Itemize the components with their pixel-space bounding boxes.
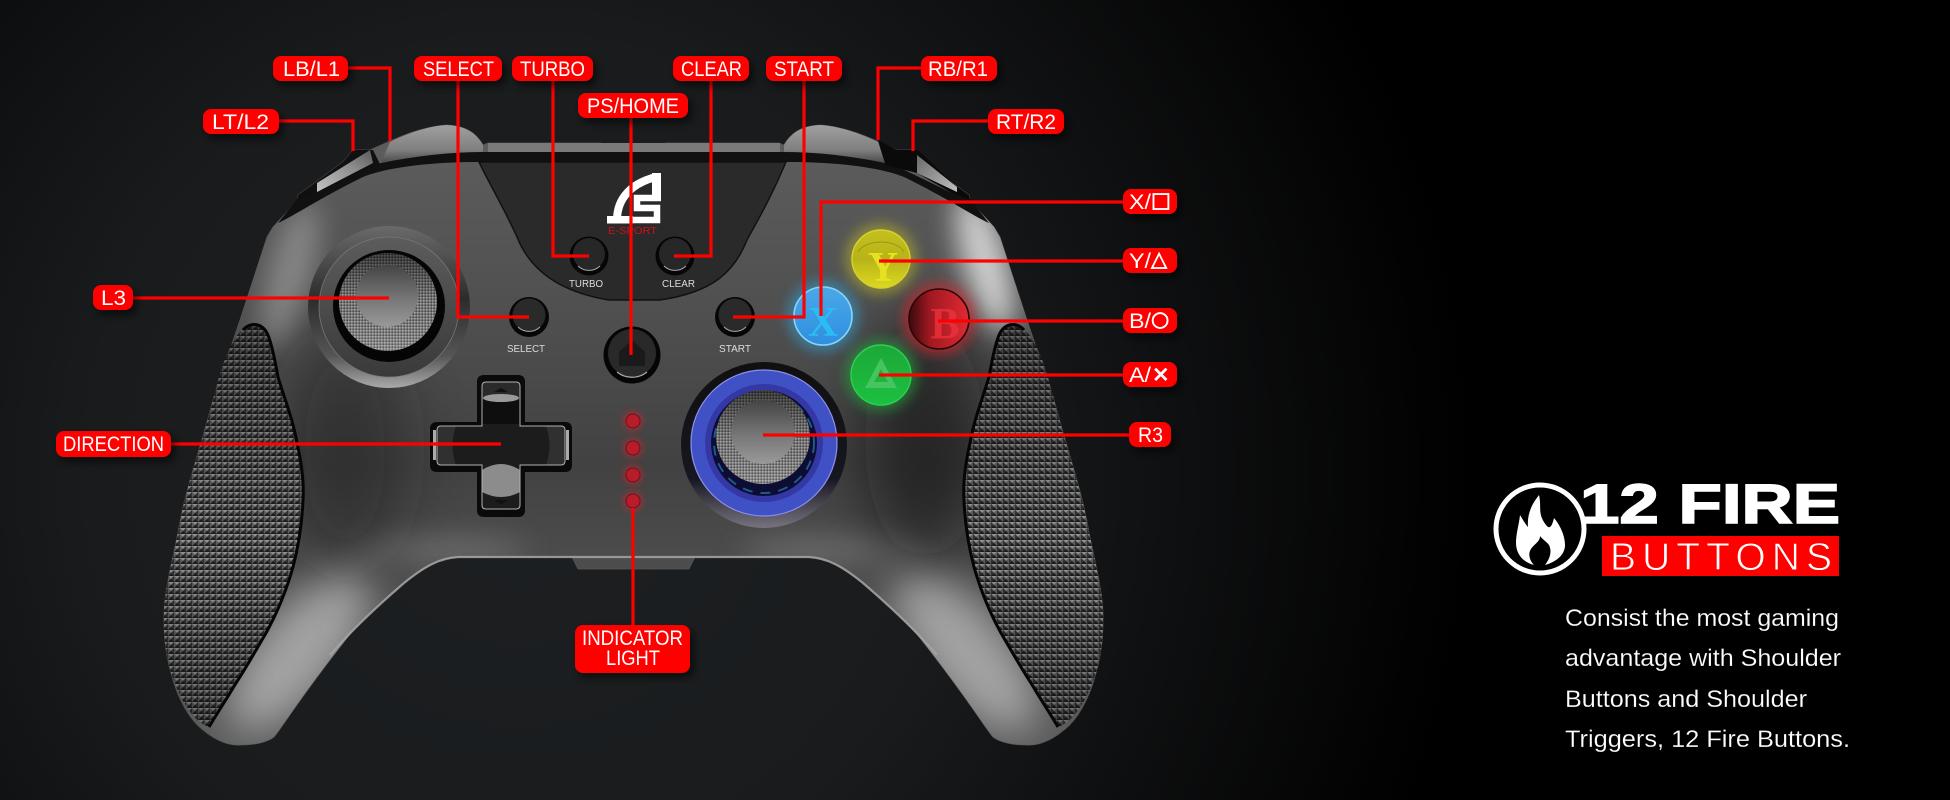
label: Y/triangle: Y/ — [1129, 250, 1151, 273]
label: LT/L2 — [203, 109, 279, 134]
label: TURBO: TURBO — [520, 58, 585, 81]
indicator lights — [622, 410, 644, 512]
label: X/square: X/ — [1129, 191, 1151, 214]
turbo button — [570, 236, 608, 276]
B button: B — [930, 299, 960, 348]
X button — [787, 280, 859, 352]
small button captions — [507, 278, 752, 355]
brand logo — [607, 173, 661, 237]
left trigger housing — [298, 150, 380, 200]
description text: advantage with Shoulder — [1565, 645, 1841, 672]
label: B/circle: B/ — [1129, 310, 1151, 333]
label: X/square — [1123, 188, 1177, 214]
label: Y/triangle: △ — [1151, 247, 1168, 271]
label: RT/R2: RT/R2 — [996, 111, 1056, 134]
A button — [845, 339, 917, 411]
clear button — [656, 236, 694, 276]
label: INDICATOR LIGHT: LIGHT — [606, 647, 660, 670]
icon: flame in circle — [1496, 485, 1584, 573]
left stick — [308, 226, 470, 388]
label: LT/L2: LT/L2 — [212, 111, 269, 134]
center face panel — [479, 162, 786, 300]
logo caption: E-SPORT — [608, 225, 658, 237]
label: CLEAR: CLEAR — [681, 58, 742, 81]
label: R3: R3 — [1138, 424, 1163, 447]
Y button: Y — [868, 245, 898, 291]
small button captions: START — [719, 343, 752, 355]
heading: BUTTONS: BUTTONS — [1610, 536, 1832, 579]
heading: 12 FIRE: 12 FIRE — [1580, 472, 1840, 535]
description text — [1565, 605, 1850, 753]
home button — [604, 326, 660, 384]
description text: Triggers, 12 Fire Buttons. — [1565, 726, 1850, 753]
label: B/circle — [1123, 307, 1177, 333]
controller body — [164, 125, 1103, 745]
label: INDICATOR LIGHT — [575, 625, 690, 673]
body shading — [204, 184, 1061, 754]
start button — [715, 297, 755, 337]
left trigger LT — [317, 150, 373, 192]
leader lines — [133, 68, 1129, 625]
right bumper RB — [784, 125, 885, 163]
description text: Buttons and Shoulder — [1565, 686, 1807, 713]
Y button — [845, 223, 917, 295]
label: L3: L3 — [101, 287, 126, 310]
label: DIRECTION: DIRECTION — [63, 433, 164, 456]
shoulder band — [278, 152, 989, 223]
label: LB/L1 — [273, 56, 348, 81]
right trigger housing — [878, 140, 969, 200]
label: INDICATOR LIGHT: INDICATOR — [582, 627, 683, 650]
left bumper LB — [381, 125, 483, 163]
label: A/cross: A/ — [1129, 364, 1151, 387]
label: START: START — [774, 58, 834, 81]
feature block: 12 fire buttons — [1496, 472, 1850, 753]
bottom edge highlight — [330, 557, 937, 655]
small button captions: CLEAR — [662, 278, 695, 290]
left grip — [164, 324, 303, 727]
d-pad — [430, 375, 572, 517]
select button — [509, 297, 549, 337]
label: RB/R1: RB/R1 — [928, 58, 988, 81]
small button captions: TURBO — [569, 278, 603, 290]
label: A/cross: ✕ — [1152, 363, 1170, 387]
label: R3 — [1129, 422, 1171, 447]
label: LB/L1: LB/L1 — [283, 58, 340, 81]
label: SELECT: SELECT — [423, 58, 494, 81]
label: A/cross — [1123, 362, 1177, 387]
B button — [903, 283, 975, 355]
game controller — [164, 125, 1103, 754]
label: PS/HOME: PS/HOME — [587, 95, 679, 118]
label: Y/triangle — [1123, 247, 1177, 273]
right trigger RT — [917, 155, 957, 192]
label: B/circle: ○ — [1151, 307, 1169, 331]
charging port nub — [600, 138, 666, 143]
description text: Consist the most gaming — [1565, 605, 1839, 632]
label: L3 — [93, 285, 133, 310]
right grip — [964, 324, 1103, 727]
label: X/square: □ — [1151, 188, 1171, 212]
small button captions: SELECT — [507, 343, 546, 355]
X button: X — [808, 300, 838, 346]
rear strip — [488, 143, 780, 152]
small buttons — [509, 236, 755, 384]
right stick — [681, 362, 847, 528]
